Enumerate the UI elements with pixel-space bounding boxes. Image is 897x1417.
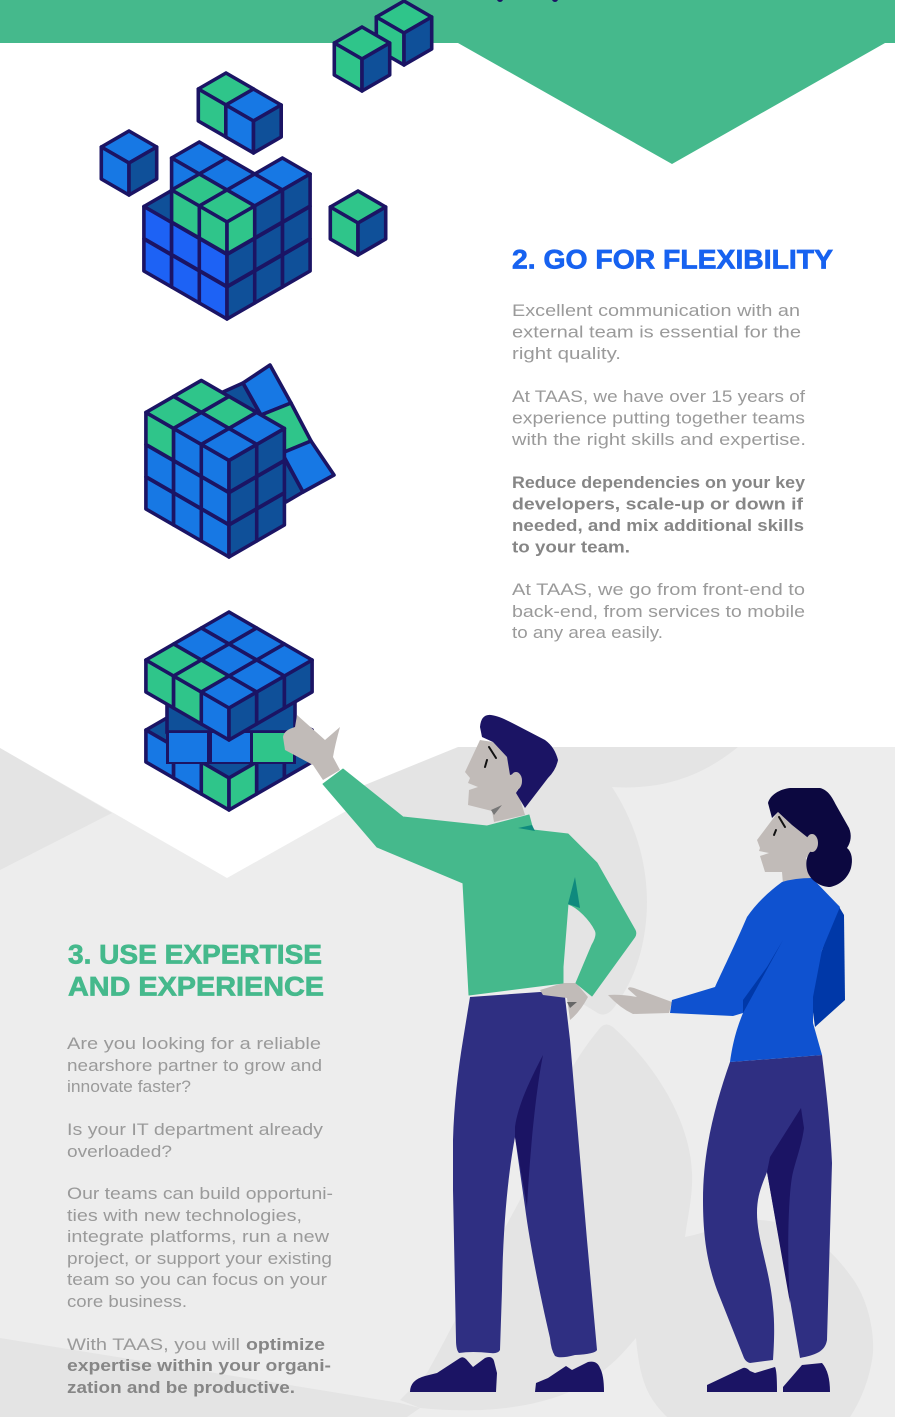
woman: trousers xyxy=(703,1055,832,1363)
icon: cube being assembled xyxy=(144,142,310,319)
woman: face and neck xyxy=(757,812,817,884)
man: sweater shadows xyxy=(518,825,580,908)
woman: shoes xyxy=(707,1363,830,1392)
woman: sleeve shadow xyxy=(743,940,783,1013)
text block: our teams: Our teams can build opportuni- xyxy=(67,1185,333,1203)
text block: reduce dependencies: to your team. xyxy=(512,538,630,556)
woman: hair xyxy=(768,788,852,887)
icon: two green cubes at the top xyxy=(334,1,432,91)
text block: with TAAS xyxy=(67,1336,331,1397)
text block: nearshore partner: Are you looking for a reliable xyxy=(67,1035,321,1053)
man: ear xyxy=(510,772,522,790)
woman: back arm xyxy=(810,905,845,1027)
text block: reduce dependencies: developers, scale-up or down if xyxy=(512,496,804,514)
illustration: man reaching for cube xyxy=(283,715,636,1392)
man: hand xyxy=(283,715,340,780)
text block: our teams: ties with new technologies, xyxy=(67,1207,302,1225)
text block: communication: Excellent communication with an xyxy=(512,302,800,320)
text block: IT department: Is your IT department already xyxy=(67,1121,324,1139)
woman: facial details xyxy=(774,817,785,835)
text block: reduce dependencies: Reduce dependencies on your key xyxy=(512,474,806,492)
woman: ear xyxy=(806,834,818,852)
panel: grey background with white chevron xyxy=(0,747,895,1417)
text block: front-end to back-end: At TAAS, we go from front-end to xyxy=(512,581,805,599)
man: hand on hip xyxy=(540,983,588,1020)
text block: with TAAS: expertise within your organi- xyxy=(67,1357,331,1375)
man: hair xyxy=(480,715,558,808)
text block: IT department xyxy=(67,1121,324,1161)
text block: communication: external team is essential for the xyxy=(512,324,801,342)
text block: experience: experience putting together teams xyxy=(512,410,805,428)
illustration: woman xyxy=(608,788,852,1392)
text block: reduce dependencies xyxy=(512,474,806,556)
man: trouser shadow xyxy=(515,1055,543,1207)
woman: sweater xyxy=(670,878,840,1062)
text block: experience: with the right skills and expertise. xyxy=(511,431,806,449)
text block: our teams xyxy=(67,1185,333,1311)
text block: reduce dependencies: needed, and mix additional skills xyxy=(512,517,804,535)
text block: nearshore partner: nearshore partner to grow and xyxy=(67,1057,322,1075)
text block: our teams: core business. xyxy=(67,1293,187,1311)
man: facial details xyxy=(485,747,502,815)
text block: front-end to back-end xyxy=(512,581,805,642)
man: neck and face xyxy=(465,740,525,822)
icon: green and blue cube pair xyxy=(198,73,281,153)
text block: experience xyxy=(511,388,806,449)
icon: single blue cube xyxy=(101,131,157,195)
text block: experience: At TAAS, we have over 15 years of xyxy=(512,388,805,406)
heading: go for flexibility: 2. GO FOR FLEXIBILITY xyxy=(512,244,833,274)
text block: with TAAS: With TAAS, you will xyxy=(67,1336,240,1354)
man: shoes xyxy=(410,1357,604,1392)
woman: trouser shadow xyxy=(767,1108,804,1303)
text block: communication xyxy=(512,302,801,363)
text block: our teams: team so you can focus on your xyxy=(67,1271,328,1289)
text block: IT department: overloaded? xyxy=(67,1143,172,1161)
man: hip shadow xyxy=(567,1002,577,1008)
heading: use expertise and experience: AND EXPERIENCE xyxy=(68,972,324,1002)
man: sweater xyxy=(323,769,636,996)
text block: communication: right quality. xyxy=(512,345,621,363)
woman: hand xyxy=(608,987,672,1014)
text block: nearshore partner: innovate faster? xyxy=(67,1078,191,1096)
panel: green top banner with chevron xyxy=(0,0,895,164)
man: trousers xyxy=(453,992,597,1357)
heading: use expertise and experience xyxy=(68,940,324,1002)
text block: our teams: project, or support your existing xyxy=(67,1250,332,1268)
icon: single green cube xyxy=(330,191,386,255)
icon: cut-off marks at top edge xyxy=(497,0,558,2)
text block: front-end to back-end: back-end, from services to mobile xyxy=(512,603,805,621)
icon: cube with twisting layers xyxy=(146,612,312,810)
text block: with TAAS: zation and be productive. xyxy=(67,1379,295,1397)
icon: cube with rotated slice xyxy=(146,365,334,557)
text block: with TAAS: optimize xyxy=(246,1336,325,1354)
text block: front-end to back-end: to any area easily. xyxy=(512,624,663,642)
heading: use expertise and experience: 3. USE EXPERTISE xyxy=(68,940,322,970)
text block: our teams: integrate platforms, run a new xyxy=(67,1228,329,1246)
text block: nearshore partner xyxy=(67,1035,322,1096)
